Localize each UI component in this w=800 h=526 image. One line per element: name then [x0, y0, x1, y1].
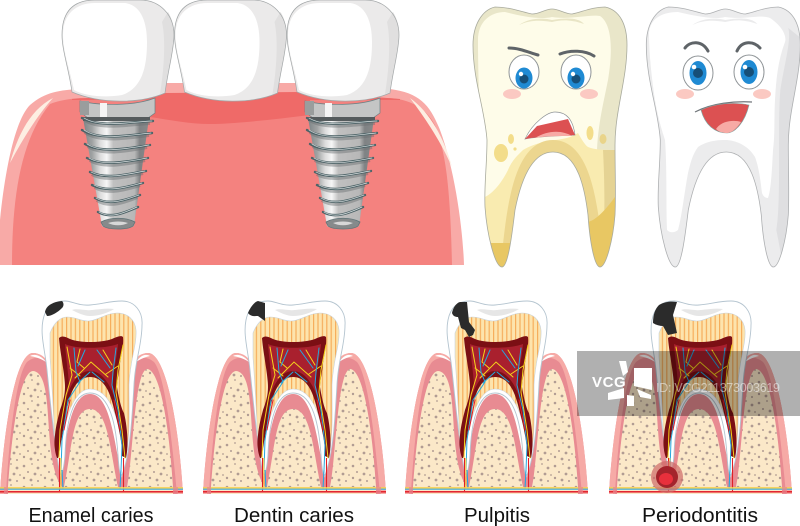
diagram: enamel caries: [0, 301, 183, 494]
watermark logo: [592, 361, 652, 406]
implant: left screw: [80, 98, 155, 229]
angry eyebrows: [509, 48, 594, 56]
eyes: [683, 55, 764, 90]
frowning mouth: [525, 112, 575, 139]
watermark logo: VCG: [592, 374, 626, 391]
cavity: [452, 302, 475, 337]
watermark id: ID: VCG211373003619: [656, 381, 780, 395]
smiling mouth: [695, 102, 752, 133]
crown: middle: [174, 0, 286, 101]
eyes: [509, 55, 591, 89]
panel: unhappy yellow tooth: [473, 7, 627, 280]
abscess: [651, 461, 683, 493]
diagram: periodontitis: [609, 301, 792, 494]
diagram: dentin caries: [203, 301, 386, 494]
tooth body: [646, 7, 800, 270]
cavity: [248, 301, 265, 321]
panel: dental implant bridge: [0, 0, 464, 265]
diagram: pulpitis: [405, 301, 588, 494]
crown: left: [62, 0, 174, 101]
happy eyebrows: [685, 43, 760, 51]
watermark: [577, 351, 800, 416]
panel: happy white tooth: [646, 7, 800, 270]
cavity: [45, 301, 64, 316]
implant: right screw: [305, 98, 380, 229]
cavity: [653, 302, 677, 335]
crown: right: [287, 0, 399, 101]
gum tissue: [0, 83, 464, 265]
cheeks: [676, 89, 771, 99]
cheeks: [503, 89, 598, 99]
tooth body with plaque: [473, 7, 627, 280]
